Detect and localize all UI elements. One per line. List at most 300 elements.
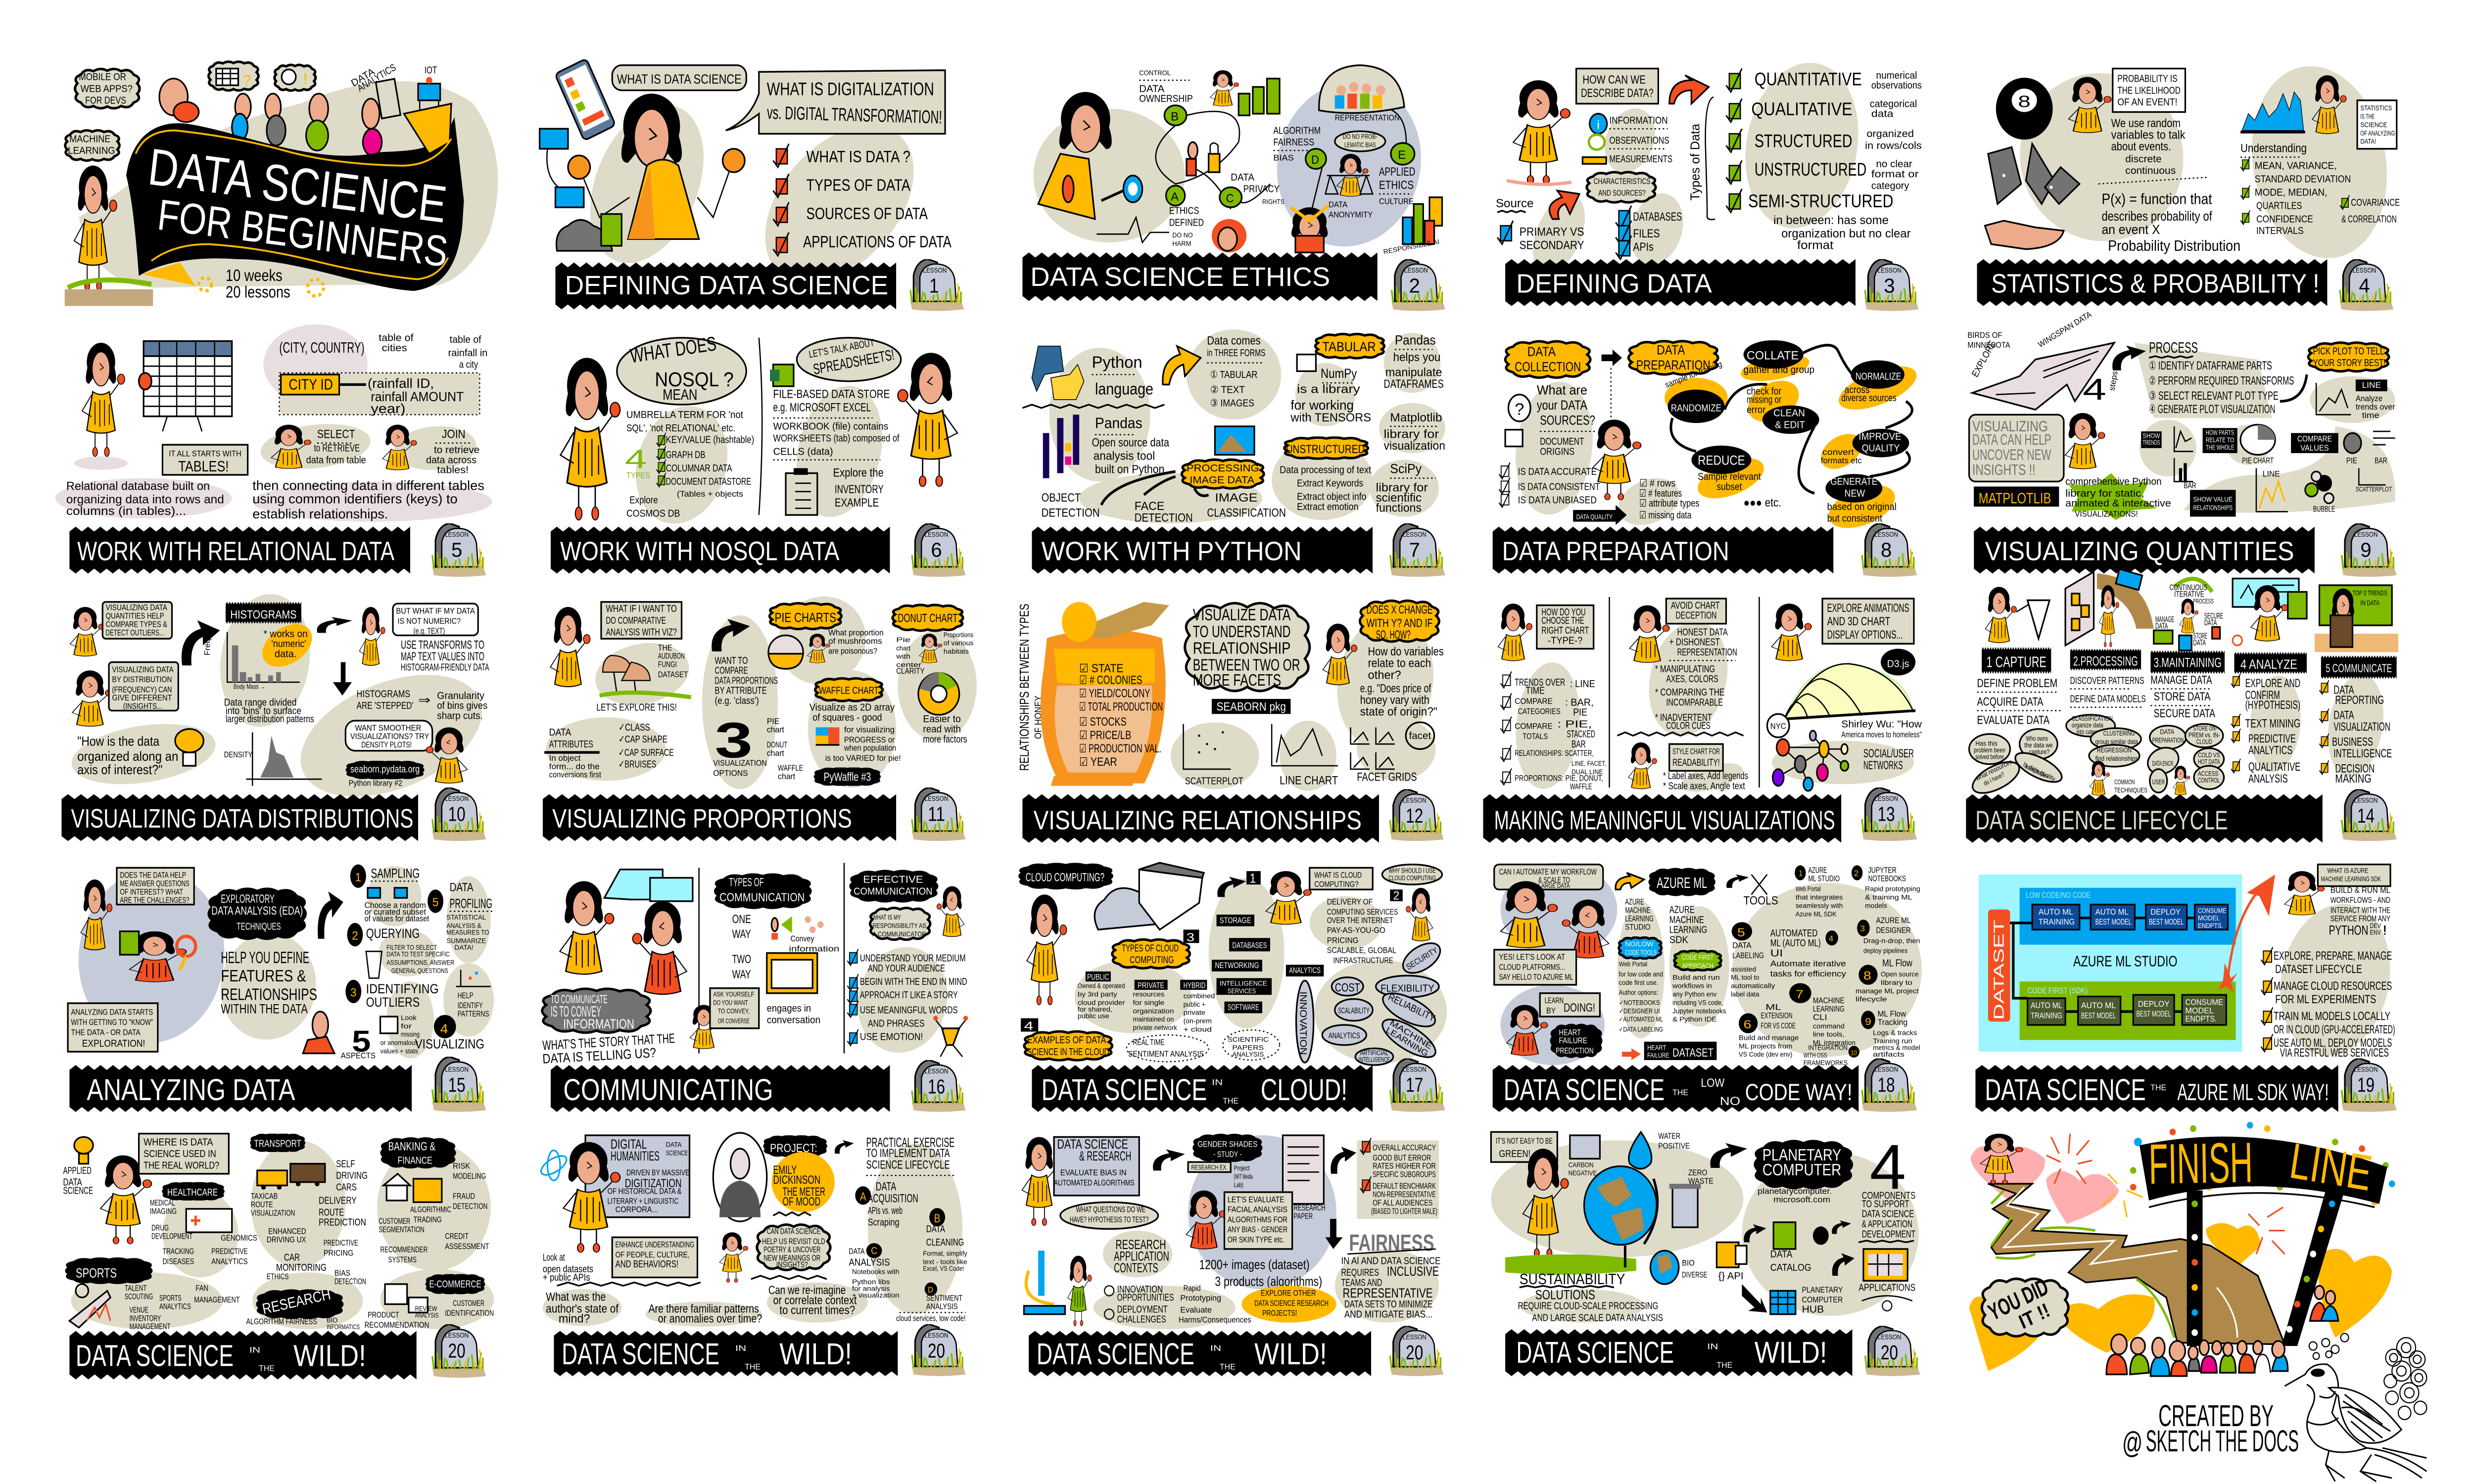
transport group: ENHANCED [268,1227,306,1236]
technique bubbles: find relationships [2095,755,2138,762]
benefits ovals: RELIABILITY [1386,991,1437,1024]
cloud: responsibility: WHAT IS MY [872,914,901,921]
small persons select and join [271,425,479,476]
background blobs [2135,343,2395,513]
image processing branch: IMAGE [1215,491,1257,504]
pandas bars and text [1043,415,1169,478]
person [719,1232,748,1283]
tool 10 oss: WITH OSS [1804,1052,1827,1059]
waffle chart section: PROGRESS or [844,735,895,744]
arrows [182,617,352,696]
dice [1988,144,2080,204]
waffle chart section: when population [844,743,896,753]
step: improve quality: QUALITY [1862,443,1900,454]
person and callout: MACHINE LEARNING SDK [2321,875,2381,882]
background blobs [1171,606,1445,791]
sdk checklist: USE AUTO ML, DEPLOY MODELS [2274,1036,2392,1049]
four components text: 4 [1870,1132,1906,1203]
donut chart section: with [896,652,910,660]
type notes: format [1797,238,1834,252]
lesson stone 10 [432,788,486,841]
project label: PROJECT: [770,1141,817,1155]
starburst matplotlib description [2065,473,2171,520]
sports group [66,1258,240,1331]
person 1 and callout: DETECT OUTLIERS... [106,628,164,638]
technique bubbles: group similar data [2095,738,2138,745]
planetary computer url: microsoft.com [1773,1195,1830,1204]
question bubbles: acceptable? [2024,762,2050,781]
green ground [1505,1254,1636,1275]
cloud: can data science help: INSIGHTS? [776,1260,808,1269]
transport group: TRANSPORT [254,1138,301,1150]
honey data list: ☑ PRICE/LB [1079,728,1131,742]
cloud: can data science help [757,1225,830,1270]
transport group [251,1134,368,1273]
scatter plot [1184,724,1243,787]
banner: data preparation: DATA PREPARATION [1502,536,1729,566]
banner: visualizing quantities: VISUALIZING QUANTITIES [1985,536,2294,566]
speech bubble: spreadsheets: LET'S TALK ABOUT [808,337,875,360]
step 5 communicate: REPORTING [2335,693,2384,706]
person and callout: WHERE IS DATA [143,1137,213,1148]
scatter plot: SCATTERPLOT [1185,776,1243,787]
tool 5 data labeling: automatically [1731,982,1775,990]
understanding list: QUARTILES [2256,200,2302,212]
numeric data note: * works on [264,628,308,640]
lesson stone 12: 12 [1406,805,1423,827]
project steps A to D: + visualization [852,1292,900,1299]
code first region: CONSUME [2185,998,2223,1007]
azure ml studio column [1619,897,1663,1033]
pie charts section: PIE CHARTS [775,610,836,625]
type notes: in rows/cols [1865,140,1922,151]
cloud services tags: STORAGE [1220,916,1251,925]
type notes: observations [1871,80,1922,91]
speech bubble: what does nosql mean [617,332,746,405]
lesson stone 20: 20 [1881,1342,1898,1364]
lesson stone 5: 5 [451,539,462,561]
components: hub [1770,1285,1843,1315]
chart purpose tags: RELATE TO [2206,436,2234,444]
person and callout: avoid deception [1629,599,1726,662]
banner: visualizing proportions [543,794,896,841]
black cloud: azure ml: AZURE ML [1657,875,1707,891]
tool 8 ml flow: lifecycle [1856,995,1887,1003]
random variable text: about events. [2111,140,2171,153]
tool 6 vs code extension: EXTENSION [1761,1011,1792,1020]
cloud types: public use [1078,1012,1109,1020]
line chart card: time [2362,411,2379,420]
cloud types: 3 [1187,930,1194,944]
tool 4 automated ml: ML (AUTO ML) [1770,938,1821,949]
icon: water drop: POSITIVE [1658,1142,1690,1151]
tool 7 cli: command [1813,1022,1845,1030]
benefits ovals [1322,937,1445,1065]
type notes: organized [1866,129,1914,139]
cloud: pick plot: YOUR STORY BEST! [2313,358,2385,369]
yellow ellipse: explore other research [1242,1286,1336,1323]
tool 2 jupyter [1852,865,1920,909]
maintenance bubbles: COLD VS [2198,751,2220,759]
lesson stone 6: LESSON [925,531,948,538]
python text: language [1095,379,1153,398]
communicate illustration: IN DATA [2360,599,2379,607]
description: columns (in tables)... [66,504,186,517]
understanding list: INTERVALS [2256,226,2304,236]
transport group: DRIVING [336,1170,368,1181]
project steps A to D: C [871,1246,877,1256]
person and callout: WHAT IS AZURE [2327,867,2369,874]
random variable text: P(x) = function that [2101,191,2212,208]
person with callout: OF ANALYZING [2360,129,2395,137]
data source questions: ? [1515,399,1524,418]
spreadsheet definition: CELLS (data) [773,446,833,458]
planetary computer url [1758,1187,1832,1204]
type notes [1773,70,1922,252]
hearts background [1969,1146,2392,1371]
data source questions: SOURCES? [1540,413,1595,428]
one way / two way: TWO [732,952,751,966]
data cubes [540,129,584,207]
person and research callout: DATA SCIENCE [1057,1136,1128,1152]
speech bubble: table question: ? [243,72,251,89]
mini charts: BUBBLE [2313,505,2335,513]
network graph: SOCIAL/USER [1863,747,1914,760]
speech bubble: questions: HAVE? HYPOTHESIS TO TEST? [1070,1215,1148,1224]
chart selection list: PROPORTIONS: PIE, DONUT, [1515,774,1603,783]
one way / two way: information [789,944,839,953]
chart selection list: TOTALS [1522,732,1548,741]
low code region: ENDPTS. [2198,922,2223,929]
findings box: (BIASED TO LIGHTER MALE) [1371,1207,1437,1216]
number 1 tag [1246,871,1261,886]
line chart card: trends over [2356,403,2395,412]
background blob [2266,891,2405,1068]
cloud and server [556,214,621,251]
transport group: CARS [336,1182,357,1193]
cloud types: combined [1184,992,1215,1000]
mushrooms: THE [658,643,672,652]
mini charts [2174,425,2395,513]
image processing branch: DETECTION [1042,506,1100,519]
cloud types: private [1184,1009,1205,1017]
person and callout: animations: DISPLAY OPTIONS... [1827,628,1903,641]
lesson stone 20: LESSON [1403,1333,1427,1341]
project steps A to D: ANALYSIS [849,1257,890,1268]
chart purpose tags [2141,428,2338,516]
line chart [1272,724,1338,787]
sports group: FAN [195,1284,208,1293]
healthcare group [150,1183,257,1266]
cloud types: for shared, [1078,1006,1112,1013]
understanding list: MODE, MEDIAN, [2255,187,2327,198]
data privacy label [1231,172,1373,220]
background blobs [1049,329,1445,523]
aspects 4 visualizing: HELP [458,991,474,1000]
person and research callout: EVALUATE BIAS IN [1060,1168,1127,1177]
components: hub: PLANETARY [1802,1285,1843,1295]
chart purpose tags: THE WHOLE [2206,444,2234,451]
fairness text [1341,1229,1440,1320]
four components text: COMPONENTS [1862,1190,1915,1202]
background blobs [546,584,977,789]
report document [376,79,400,119]
sdk description: PYTHON [2329,923,2368,938]
lesson stone 20: LESSON [925,1332,948,1339]
donut chart section: CLARITY [896,667,925,676]
speech bubble: what does nosql mean: NOSQL ? [655,369,734,391]
four types list: COLUMNAR DATA [666,463,732,474]
histogram description: larger distribution patterns [226,714,314,725]
portrait of emily dickinson [713,1133,767,1221]
deception list [1617,627,1744,736]
banking group: FINANCE [398,1155,432,1166]
lesson stone 3 [1865,259,1919,311]
bird illustration [1972,343,2114,410]
banking group: MODELING [453,1172,486,1181]
step 5 communicate [2320,655,2397,785]
mushrooms: FUNGI [658,660,677,669]
tool 9 ml flow tracking: Training run [1873,1037,1912,1045]
four types list: Explore [629,495,658,506]
step: clean and edit: check for [1747,386,1781,397]
arrow and compare text: (e.g. 'class') [715,696,759,706]
cloud types [1078,929,1215,1033]
project note [1234,1164,1253,1189]
person standing on soil [65,166,153,306]
lesson stone 11: LESSON [925,795,948,802]
step: improve quality: IMPROVE [1858,431,1901,442]
step: normalize: diverse sources [1841,393,1897,404]
fairness text: DATA SETS TO MINIMIZE [1344,1299,1432,1310]
waffle chart section [809,678,901,763]
histogram chart [2240,92,2305,132]
components: api: {} API [1718,1270,1744,1282]
project steps A to D: Notebooks with [852,1268,900,1276]
small persons select and join: data across [426,455,476,465]
small persons select and join: to retrieve [434,445,479,456]
lesson stone 13: 13 [1878,803,1895,826]
seaborn label: seaborn.pydata.org [350,764,420,775]
code first region [2020,981,2236,1040]
banner: data science in the wild 2: IN [735,1344,746,1353]
ecommerce group [365,1275,494,1330]
technique bubbles: REGRESSION [2097,746,2132,754]
tool 3 designer [1857,916,1920,955]
banner: data science in the wild 1: THE [259,1364,275,1373]
aspects 2 querying: DATA TO TEST SPECIFIC [386,950,450,958]
project steps A to D: B [934,1211,941,1225]
research group [246,1269,366,1331]
project label: EMILY [773,1163,797,1176]
black banner [126,117,464,291]
background blobs [1501,863,1922,1065]
low code region: DEPLOY [2150,908,2181,917]
project steps A to D: text - tools like [923,1258,967,1265]
person with callout: SCIENCE [2360,121,2387,129]
research contexts: RESEARCH [1115,1237,1166,1252]
code first region: BEST MODEL [2137,1010,2171,1019]
aspects 2 querying: 2 [352,929,358,942]
research paper document [1283,1135,1326,1221]
background blobs [543,1144,962,1327]
unstructured cloud and list: UNSTRUCTURED [1286,442,1365,456]
findings box: GOOD BUT ERROR [1373,1153,1431,1162]
person and callout: OF INTEREST? WHAT [120,887,183,896]
research contexts: CONTEXTS [1114,1260,1158,1275]
tool 9 ml flow tracking: Logs & tracks [1873,1029,1917,1036]
data privacy label: PRIVACY [1243,184,1280,195]
peacock body [2284,1364,2426,1482]
honey data list: ☑ YIELD/COLONY [1079,687,1150,700]
banner: data science in the wild 1: WILD! [293,1339,366,1373]
processing illustration [2065,569,2154,647]
stepped note: sharp cuts. [437,710,483,722]
azure ml studio column: code first use. [1619,979,1658,986]
azure ml studio column: CODE TOOLS [1625,949,1657,956]
cloud: visualize data [1185,603,1310,691]
speech bubble: no bias [1335,131,1385,151]
speech bubble: spreadsheets: SPREADSHEETS! [812,346,896,378]
aspects 5 data profiling: PROFILING [450,896,492,911]
person 1 and callout: VISUALIZING DATA [106,603,167,612]
project label: DICKINSON [773,1173,820,1186]
seaborn tag: SEABORN pkg [1217,700,1286,713]
tool 10 oss: FRAMEWORKS [1804,1059,1848,1067]
project label: THE METER [783,1185,825,1198]
waffle chart section: for visualizing [844,725,895,735]
findings box: RATES HIGHER FOR [1373,1161,1436,1171]
sports group: VENUE [129,1305,148,1314]
cloud: visualize data: BETWEEN TWO OR [1193,655,1300,674]
cloud types: PRIVATE [1138,981,1164,990]
sources list: Source [1496,197,1533,210]
icon: small globe bio diverse: DIVERSE [1682,1270,1707,1280]
person with callout: IS THE [2360,113,2375,120]
bird labels: MINNESOTA [1967,341,2010,350]
rainfall fields: year) [371,401,406,416]
question: reimagine: to current times? [779,1303,855,1317]
unstructured cloud and list: Extract Keywords [1297,478,1363,489]
cloud: visualize data: VISUALIZE DATA [1193,605,1290,624]
lesson stone 20: LESSON [1878,1333,1901,1341]
cloud types: COMPUTING [1130,954,1174,966]
project note: Project [1234,1164,1250,1172]
banner: defining data: DEFINING DATA [1516,269,1712,299]
data quality list: ●●● etc. [1744,496,1781,509]
person and callout: avoid deception: AVOID CHART [1671,600,1720,611]
aspects 3 outliers: for [401,1022,412,1030]
effective communication checklist: AND YOUR AUDIENCE [868,963,945,974]
step 2 processing: DISCOVER PATTERNS [2070,675,2144,687]
ethics defined label: DEFINED [1169,217,1204,228]
atom icon [538,1151,569,1180]
code first region: DEPLOY [2138,999,2170,1009]
fairness text: FAIRNESS [1349,1229,1434,1256]
panel: lesson 19 azure ml sdk [1975,865,2405,1112]
dataset counts: 3 products (algorithms) [1215,1274,1322,1289]
callout: learn by doing: BY [1546,1006,1556,1015]
data source questions: What are [1537,382,1587,398]
arch posts [2187,1191,2345,1346]
tool 4 automated ml: Automate iterative [1770,959,1846,969]
research group: BIO [327,1316,337,1324]
chart selection list: STACKED [1567,729,1595,740]
transport group: PRICING [324,1249,353,1258]
tabular cloud: TABULAR [1322,339,1376,354]
person and ask yourself callout: TO CONVEY, [718,1007,750,1015]
cloud services tags: ANALYTICS [1289,966,1321,975]
healthcare group: IMAGING [150,1207,177,1216]
aspects 3 outliers: Look [401,1014,417,1021]
define features text: FEATURES & [221,966,306,985]
cloud types: TYPES OF CLOUD [1122,943,1179,954]
main title [145,138,450,277]
side spectators [2310,1286,2338,1321]
benefits ovals: FLEXIBILITY [1380,983,1434,994]
ecommerce group: REVIEW [415,1305,437,1312]
step 1 capture: EVALUATE DATA [1977,713,2050,727]
deception list: COLOR CUES [1666,720,1711,732]
background blobs [55,325,492,522]
data attributes list: ✓CAP SURFACE [618,747,674,758]
person [2065,413,2105,469]
callout: enhance understanding: ENHANCE UNDERSTANDING [616,1240,694,1250]
tool 4 automated ml: UI [1770,948,1783,959]
banner: low code: DATA SCIENCE [1504,1073,1665,1107]
clipboard and inventory example: EXAMPLE [835,496,879,509]
banking group: ASSESSMENT [445,1242,489,1251]
dataset counts: 1200+ images (dataset) [1199,1257,1310,1272]
ethics path with letters: C [1226,191,1234,205]
unstructured cloud and list: Extract object info [1297,491,1367,503]
image processing branch: DETECTION [1135,511,1193,524]
blue callout: digital humanities: HUMANITIES [611,1148,660,1163]
donut chart section: center [896,661,922,669]
lesson stone 7: 7 [1409,539,1420,561]
aspects 2 querying [347,923,454,978]
icon: cube carbon negative [1569,1135,1600,1177]
donut chart section: habitats [944,648,969,655]
lesson stone 10: LESSON [445,795,469,802]
arrow and compare text [712,619,778,706]
cloud types: + cloud [1184,1025,1212,1033]
tabular cloud [1297,334,1384,371]
aspects 3 outliers: or anomalous [380,1039,418,1047]
tool 7 cli [1789,983,1856,1047]
person with number 2 [1390,888,1433,941]
lesson stone 8 [1862,523,1917,577]
lesson stone 18 [1862,1059,1917,1112]
mushrooms [596,643,691,713]
person 1 and callout [70,602,172,656]
question: author state: What was the [546,1290,606,1303]
callout: not easy being green: IT'S NOT EASY TO BE [1496,1137,1553,1146]
ecommerce group: CUSTOMER [453,1298,484,1308]
three visualization options: WAFFLE [778,764,803,773]
person and callout: what is cloud [1266,868,1373,925]
deception list: AXES, COLORS [1666,674,1718,685]
capture illustration [1985,587,2049,643]
tool 2 jupyter: models [1865,902,1887,909]
person 1 and callout: QUANTITIES HELP [106,611,164,621]
callout: visualizing data: INSIGHTS !! [1972,462,2036,478]
azure ml studio column: Author options: [1619,989,1658,996]
technique bubbles: CLASSIFICATION [2072,714,2113,722]
tool 6 vs code extension: ML projects from [1739,1042,1793,1050]
duration note [199,266,324,301]
step: clean and edit: & EDIT [1775,419,1805,430]
